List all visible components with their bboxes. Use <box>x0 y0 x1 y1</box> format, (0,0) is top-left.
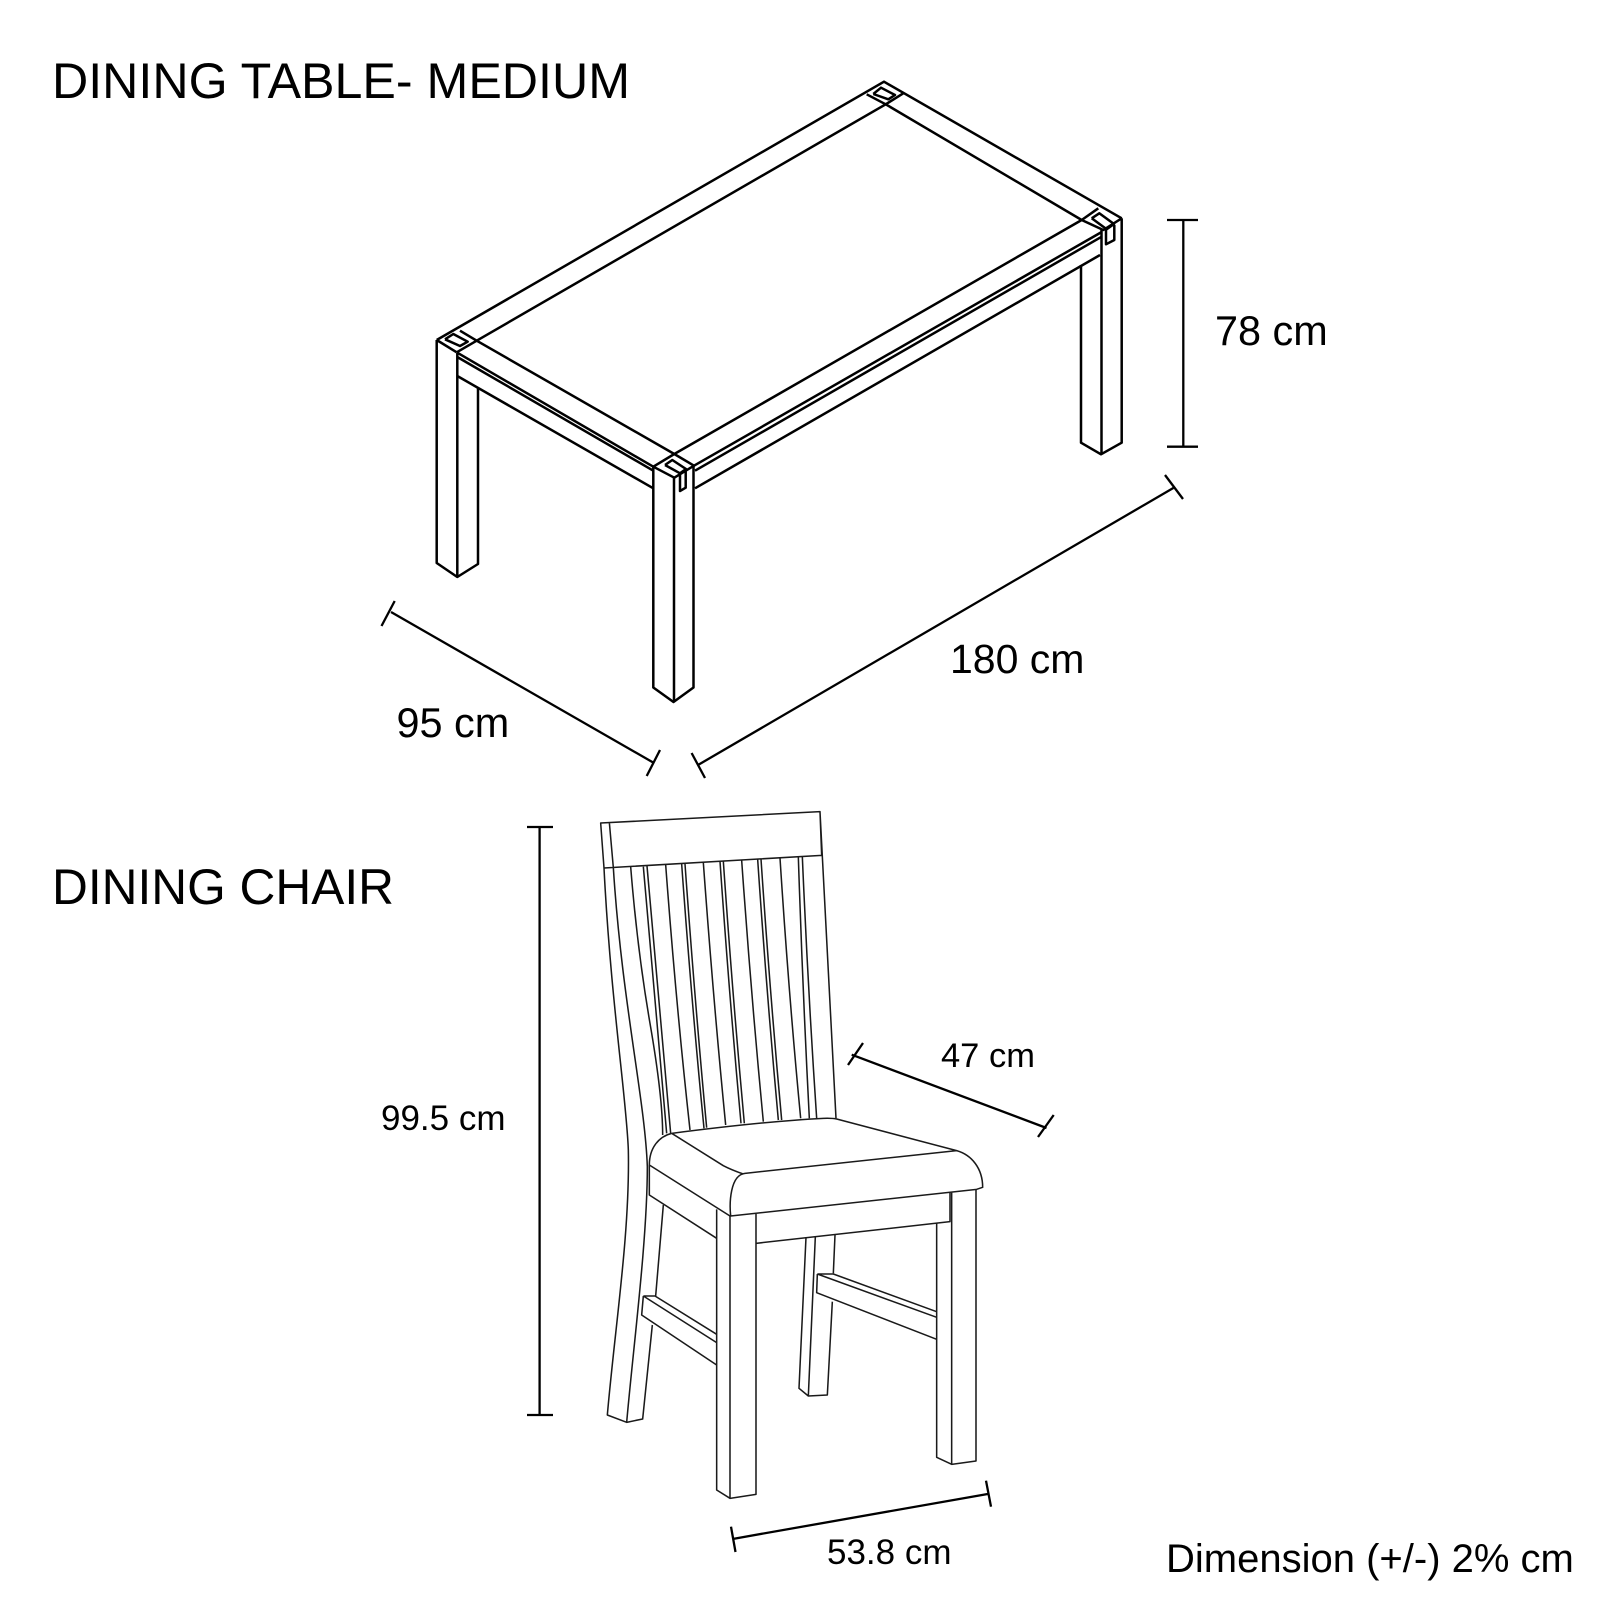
joint: right corner <box>1082 208 1122 244</box>
chair front leg: right <box>937 1189 976 1464</box>
illustration: dining chair <box>601 812 983 1498</box>
leg: left <box>437 340 478 577</box>
leg: front <box>653 466 694 702</box>
dimension: table width 95 cm <box>382 601 660 776</box>
dimension: table length 180 cm: 180 cm <box>950 636 1084 682</box>
chair rear leg: left <box>604 868 663 1422</box>
chair front leg: left <box>717 1209 756 1498</box>
title: dining chair: DINING CHAIR <box>52 859 394 915</box>
chair seat cushion <box>649 1118 983 1216</box>
chair stretcher: left <box>642 1296 717 1365</box>
dimension: table height 78 cm: 78 cm <box>1215 308 1328 354</box>
dimension: chair width 53.8 cm: 53.8 cm <box>827 1533 952 1572</box>
dimension: table width 95 cm: 95 cm <box>396 700 509 746</box>
chair rear leg: right <box>799 1235 835 1396</box>
table top <box>437 82 1122 488</box>
dimension: chair height 99.5 cm: 99.5 cm <box>381 1099 506 1138</box>
joint: back corner <box>867 88 903 104</box>
joint: left corner <box>445 331 477 352</box>
note: dimension tolerance: Dimension (+/-) 2% cm <box>1166 1537 1574 1581</box>
leg: right <box>1081 218 1122 454</box>
dimension: chair depth 47 cm: 47 cm <box>941 1037 1035 1075</box>
dimension: chair width 53.8 cm <box>731 1481 991 1572</box>
joint: front corner <box>653 454 694 491</box>
title: dining table: DINING TABLE- MEDIUM <box>52 52 630 109</box>
illustration: dining table <box>437 82 1122 702</box>
dimension: table length 180 cm <box>692 475 1183 778</box>
chair stretcher: right <box>817 1274 937 1339</box>
chair apron <box>649 1165 950 1243</box>
dimension: chair depth 47 cm <box>848 1037 1054 1137</box>
dimension: chair height 99.5 cm <box>381 827 553 1415</box>
dimension: table height 78 cm <box>1167 220 1328 447</box>
chair backrest <box>601 812 836 1135</box>
